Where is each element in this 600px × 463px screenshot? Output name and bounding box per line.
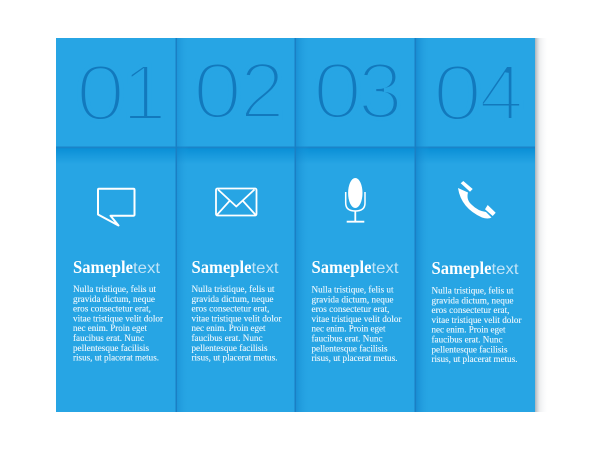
body text: eros consectetur erat, [432,305,510,316]
panel: column 4 [432,48,524,365]
body text: Nulla tristique, felis ut [432,286,514,296]
body text: gravida dictum, neque [73,294,156,305]
body text: Nulla tristique, felis ut [312,284,394,296]
icon: envelope [216,188,256,216]
number 03: 0 [313,46,362,135]
body text: faucibus erat. Nunc [432,334,503,346]
panel: blue background [56,38,535,412]
number 02: 2 [240,46,284,135]
body text: vitae tristique velit dolor [73,313,164,324]
body text: gravida dictum, neque [432,295,514,306]
panel: column 3 [312,46,402,364]
body text: Nulla tristique, felis ut [192,284,275,295]
body text: vitae tristique velit dolor [432,315,522,326]
body text: vitae tristique velit dolor [312,314,402,325]
icon: microphone [346,178,365,222]
body text [192,284,282,364]
panel: column 2 [192,46,284,364]
body text: Nulla tristique, felis ut [73,284,156,295]
body text: risus, ut placerat metus. [312,353,398,364]
number 03: 3 [358,46,402,135]
heading: text [133,260,161,277]
body text: pellentesque facilisis [192,343,268,354]
number 04: 4 [479,48,524,137]
horizontal fold shadow [56,146,535,164]
panel: column 1 [73,48,166,364]
body text: faucibus erat. Nunc [73,333,145,344]
right edge shadow [535,38,549,412]
number 01: 0 [76,48,125,137]
heading: Sameple [432,258,492,278]
number 04: 0 [433,48,482,137]
body text [73,284,164,364]
heading: text [492,261,519,278]
heading: text [372,260,399,277]
body text: eros consectetur erat, [73,304,151,315]
body text: risus, ut placerat metus. [192,353,278,364]
number 01 [76,48,166,137]
body text: nec enim. Proin eget [312,324,386,335]
vertical fold shadows [176,38,430,412]
body text: nec enim. Proin eget [432,325,506,336]
body text [312,284,402,364]
body text: vitae tristique velit dolor [192,313,282,324]
body text: risus, ut placerat metus. [73,353,159,364]
heading: Sameple [73,257,133,277]
body text: eros consectetur erat, [192,304,270,315]
body text: pellentesque facilisis [312,343,388,354]
icon: telephone handset [458,181,496,218]
body text: pellentesque facilisis [73,343,149,354]
number 04 [433,48,524,137]
heading: text [252,260,279,277]
body text: nec enim. Proin eget [192,323,266,334]
icon: speech bubble [98,189,134,226]
body text: gravida dictum, neque [192,294,274,305]
number 03 [313,46,402,135]
body text: nec enim. Proin eget [73,323,147,334]
body text [432,286,522,365]
body text: risus, ut placerat metus. [432,354,518,365]
number 01: 1 [122,48,166,137]
body text: faucibus erat. Nunc [192,333,263,344]
body text: eros consectetur erat, [312,304,390,315]
number 02 [193,46,284,135]
heading: Sameple [192,257,252,277]
body text: gravida dictum, neque [312,294,394,305]
number 02: 0 [193,46,242,135]
body text: pellentesque facilisis [432,344,508,355]
heading: Sameple [312,257,372,277]
body text: faucibus erat. Nunc [312,334,383,344]
